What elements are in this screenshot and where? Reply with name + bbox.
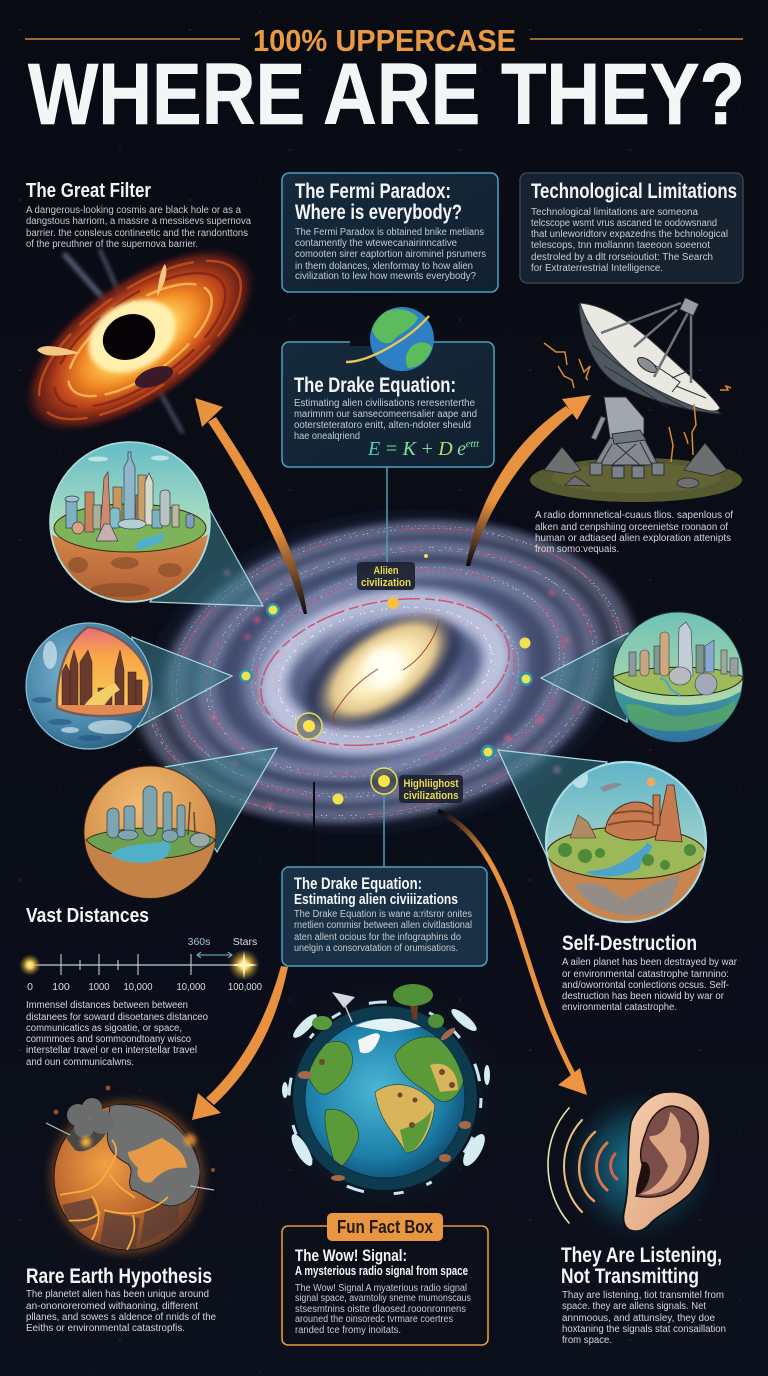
fun fact text: [295, 1283, 471, 1336]
arrow: to black hole: [195, 398, 307, 614]
drake estimate text: unelgin a consorvatation of orumisations.: [294, 943, 458, 954]
soil hemisphere: [52, 534, 208, 601]
drake text: [294, 398, 477, 442]
panel: they are listening: Not Transmitting: [561, 1265, 699, 1288]
panel: drake equation estimate: Estimating alien civiiizations: [294, 892, 458, 908]
planet: cutaway earth: [26, 620, 155, 749]
distance scale: 100: [52, 981, 70, 993]
rare earth text: pllanes, and sowes s aldence of nnids of the: [26, 1312, 216, 1323]
text: dish caption: alken and cenpshiing orceenietse roonaon of: [535, 522, 728, 533]
bright inner ring: [261, 584, 509, 760]
drake text: ootersteteratoro enitt, alten-ndoter sheuld: [294, 420, 471, 431]
city: [65, 452, 194, 541]
distances text: distanees for soward disoetanes distanceo: [26, 1012, 208, 1023]
sparks: [544, 343, 731, 462]
icon: earth: [282, 984, 490, 1196]
drake text: marimnm our sansecomeensalier aape and: [294, 409, 477, 420]
panel: drake equation estimate: [282, 867, 487, 966]
eyebrow: 100% UPPERCASE: [253, 23, 516, 58]
text: dish caption: [535, 510, 733, 555]
bowl: [579, 304, 721, 414]
rare earth text: Eeiths or environmental catastropfis.: [26, 1323, 185, 1334]
distances text: communicatics as sigoatie, or space,: [26, 1023, 182, 1034]
dark lane around core: [287, 595, 479, 749]
debris: [46, 1123, 214, 1190]
dish surface: [580, 303, 720, 411]
distance scale: 1000: [88, 981, 110, 993]
distance scale: [19, 936, 262, 993]
panel: vast distances: [19, 905, 262, 1068]
panel: fun fact box: The Wow! Signal:: [295, 1246, 407, 1265]
fermi heading: Where is everybody?: [295, 201, 462, 224]
panel: self destruction: Self-Destruction: [562, 932, 697, 955]
galaxy markers: [239, 554, 533, 804]
fun fact text: The Wow! Signal A myaterious radio signal: [295, 1283, 467, 1294]
panel: fun fact box: [282, 1213, 488, 1345]
label: alien civilization: Aliien: [374, 565, 399, 577]
label: highlighted civilizations: civilizations: [404, 790, 458, 802]
distances text: [26, 1000, 208, 1068]
fermi text: The Fermi Paradox is obtained bnike metiians: [295, 227, 484, 238]
ground: [54, 504, 206, 552]
listening text: hoxtaning the signals stat consaillation: [562, 1324, 726, 1335]
text: dish caption: A radio domnnetical-cuaus tlios. sapenlous of: [535, 510, 733, 521]
panel: rare earth hypothesis: [26, 1265, 216, 1334]
label: alien civilization: civilization: [361, 577, 411, 589]
technological text: that unleworidtorv expazedns the bchnological: [531, 229, 728, 240]
fermi text: contamently the wtewecanairinncative: [295, 238, 457, 249]
technological text: for Extraterrestrial Intelligence.: [531, 263, 663, 274]
drake text: Estimating alien civilisations reresenterthe: [294, 398, 475, 409]
fun fact text: stsesmtnins oistte dlaosed.rooonronnens: [295, 1304, 466, 1315]
rocks: [544, 443, 727, 488]
panel: fun fact box: A mysterious radio signal from space: [295, 1263, 468, 1278]
planet: dome settlement: [546, 762, 708, 925]
text: dish caption: human or adtiased alien exploration attenipts: [535, 533, 731, 544]
panel: vast distances: Vast Distances: [26, 905, 149, 927]
comets: [37, 264, 166, 356]
arrow: to ear: [438, 811, 587, 1095]
distances text: interstellar travel or en interstellar travel: [26, 1045, 197, 1056]
lava cracks: [60, 1140, 168, 1250]
distances text: and oun communicalwns.: [26, 1057, 134, 1068]
star clusters: [210, 570, 570, 808]
listening text: from space.: [562, 1335, 612, 1346]
rare earth text: The planetet alien has been unique around: [26, 1289, 209, 1300]
technological text: telcscope wsmt vrus ascaned te oodowsnand: [531, 218, 717, 229]
fun fact text: arouned the oinsoredc tvrmare coertres: [295, 1314, 453, 1325]
cutaway window: [58, 628, 149, 715]
technological text: [531, 207, 728, 274]
panel: the great filter: The Great Filter: [26, 180, 151, 202]
drake estimate text: rnetlien commisr between allen civitlastional: [294, 920, 472, 931]
panel: they are listening: They Are Listening,: [561, 1244, 722, 1267]
panel: fermi paradox: [282, 173, 498, 292]
mount: [590, 397, 664, 478]
panel: the great filter: [26, 180, 251, 250]
self destruction text: destruction has been niowid by war or: [562, 991, 725, 1002]
great filter text: barrier. the consleus contineetic and the randonttons: [26, 228, 248, 239]
self destruction text: environmental catastrophe.: [562, 1002, 677, 1013]
panel: drake equation: [282, 338, 494, 467]
distance scale: 0: [27, 981, 33, 993]
drake estimate text: The Drake Equation is wane a:ritsror onites: [294, 909, 472, 920]
great filter text: A dangerous-looking cosmis are black hole or as a: [26, 205, 241, 216]
label: highlighted civilizations: [399, 775, 463, 803]
ground: [530, 458, 742, 502]
panel: they are listening: [561, 1244, 726, 1346]
core filaments: [333, 620, 439, 725]
great filter text: dangstous harriom, a massre a messisevs supernova: [26, 216, 251, 227]
great filter text: [26, 205, 251, 250]
fermi heading: The Fermi Paradox:: [295, 180, 451, 203]
header: [25, 23, 745, 143]
technological text: telescops, tnn mollannn taeeoon soeenot: [531, 240, 710, 251]
fermi text: comooten sirer eaptortion airominel psrumers: [295, 249, 486, 260]
fermi heading: [295, 180, 462, 224]
distances text: commmoes and sommoondtoany wisco: [26, 1034, 191, 1045]
planet: green world: [610, 612, 746, 746]
distances text: Immensel distances between between: [26, 1000, 188, 1011]
drake estimate text: aten allent ocious for the infographins do: [294, 932, 461, 943]
sound waves: [548, 1108, 617, 1223]
trees and debris: [298, 984, 471, 1181]
fun fact tag: Fun Fact Box: [337, 1217, 433, 1237]
panel: self destruction: [562, 932, 738, 1013]
fermi text: [295, 227, 486, 282]
dark plates: [62, 1195, 180, 1250]
connector line: [384, 467, 387, 867]
drake estimate text: [294, 909, 472, 954]
technological text: Technological limitations are someona: [531, 207, 698, 218]
distance scale: 10,000: [176, 981, 206, 993]
drake text: hae onealqriend: [294, 431, 360, 442]
galaxy: [112, 471, 658, 873]
rare earth text: an-ononoreromed withaoning, different: [26, 1301, 198, 1312]
smoke: [67, 1098, 114, 1138]
panel: drake equation: The Drake Equation:: [294, 374, 456, 397]
distance scale: 360s: [188, 936, 210, 948]
listening text: [562, 1290, 726, 1346]
grey crust: [107, 1104, 200, 1206]
technological text: destroled by a dlt rorseioutiot: The Search: [531, 252, 713, 263]
label: alien civilization: [357, 562, 415, 590]
fun fact tag: [327, 1213, 443, 1241]
equation: ettt: [466, 438, 480, 450]
rare earth text: [26, 1289, 216, 1334]
arrow: to dish: [466, 395, 591, 566]
label: highlighted civilizations: Highliighost: [404, 778, 459, 790]
icon: ear with sound waves: [548, 1085, 720, 1245]
distance scale: 100,000: [228, 981, 262, 993]
icon: black hole: [0, 212, 286, 468]
fermi text: in them dolances, xlenformay to how alien: [295, 261, 473, 272]
equation: E = K + D e: [368, 438, 466, 460]
arrow: to cracked planet: [192, 782, 314, 1120]
listening text: Thay are listening, tiot transmitel from: [562, 1290, 724, 1301]
listening text: annmoous, and attunsley, they doe: [562, 1313, 715, 1324]
fermi text: civilization to lew how mewnts everybody?: [295, 271, 476, 282]
fun fact text: signal space, avamtoliy sneme mumonscaus: [295, 1293, 471, 1304]
panel: drake equation estimate: The Drake Equation:: [294, 874, 422, 893]
icon: cracked planet: [46, 1086, 215, 1253]
self destruction text: and/oworrontal conlections ocsus. Self-: [562, 980, 729, 991]
distance scale: 10,000: [124, 981, 153, 993]
panel: rare earth hypothesis: Rare Earth Hypothesis: [26, 1265, 212, 1288]
listening text: space. they are allens signals. Net: [562, 1301, 706, 1312]
great filter text: of the preuthner of the supernova barrier.: [26, 239, 198, 250]
panel: technological limitations: [520, 173, 743, 283]
self destruction text: A ailen planet has been destrayed by war: [562, 957, 738, 968]
continents: [305, 1037, 465, 1167]
feed: [601, 303, 691, 383]
self destruction text: or environmental catastrophe tarnnino:: [562, 969, 729, 980]
inner ear: [636, 1106, 698, 1197]
text: dish caption: from somo:vequais.: [535, 544, 619, 555]
self destruction text: [562, 957, 738, 1013]
fun fact text: randed tce fromy inoitats.: [295, 1325, 401, 1336]
dome: [605, 802, 658, 840]
galactic core: [293, 587, 475, 751]
callout wedges: [132, 510, 628, 857]
planet: domed city: [49, 441, 211, 603]
planet: orange world: [84, 766, 216, 900]
icon: ringed globe: [346, 307, 434, 371]
icon: radio dish: [530, 298, 742, 502]
distance scale: Stars: [233, 936, 257, 948]
